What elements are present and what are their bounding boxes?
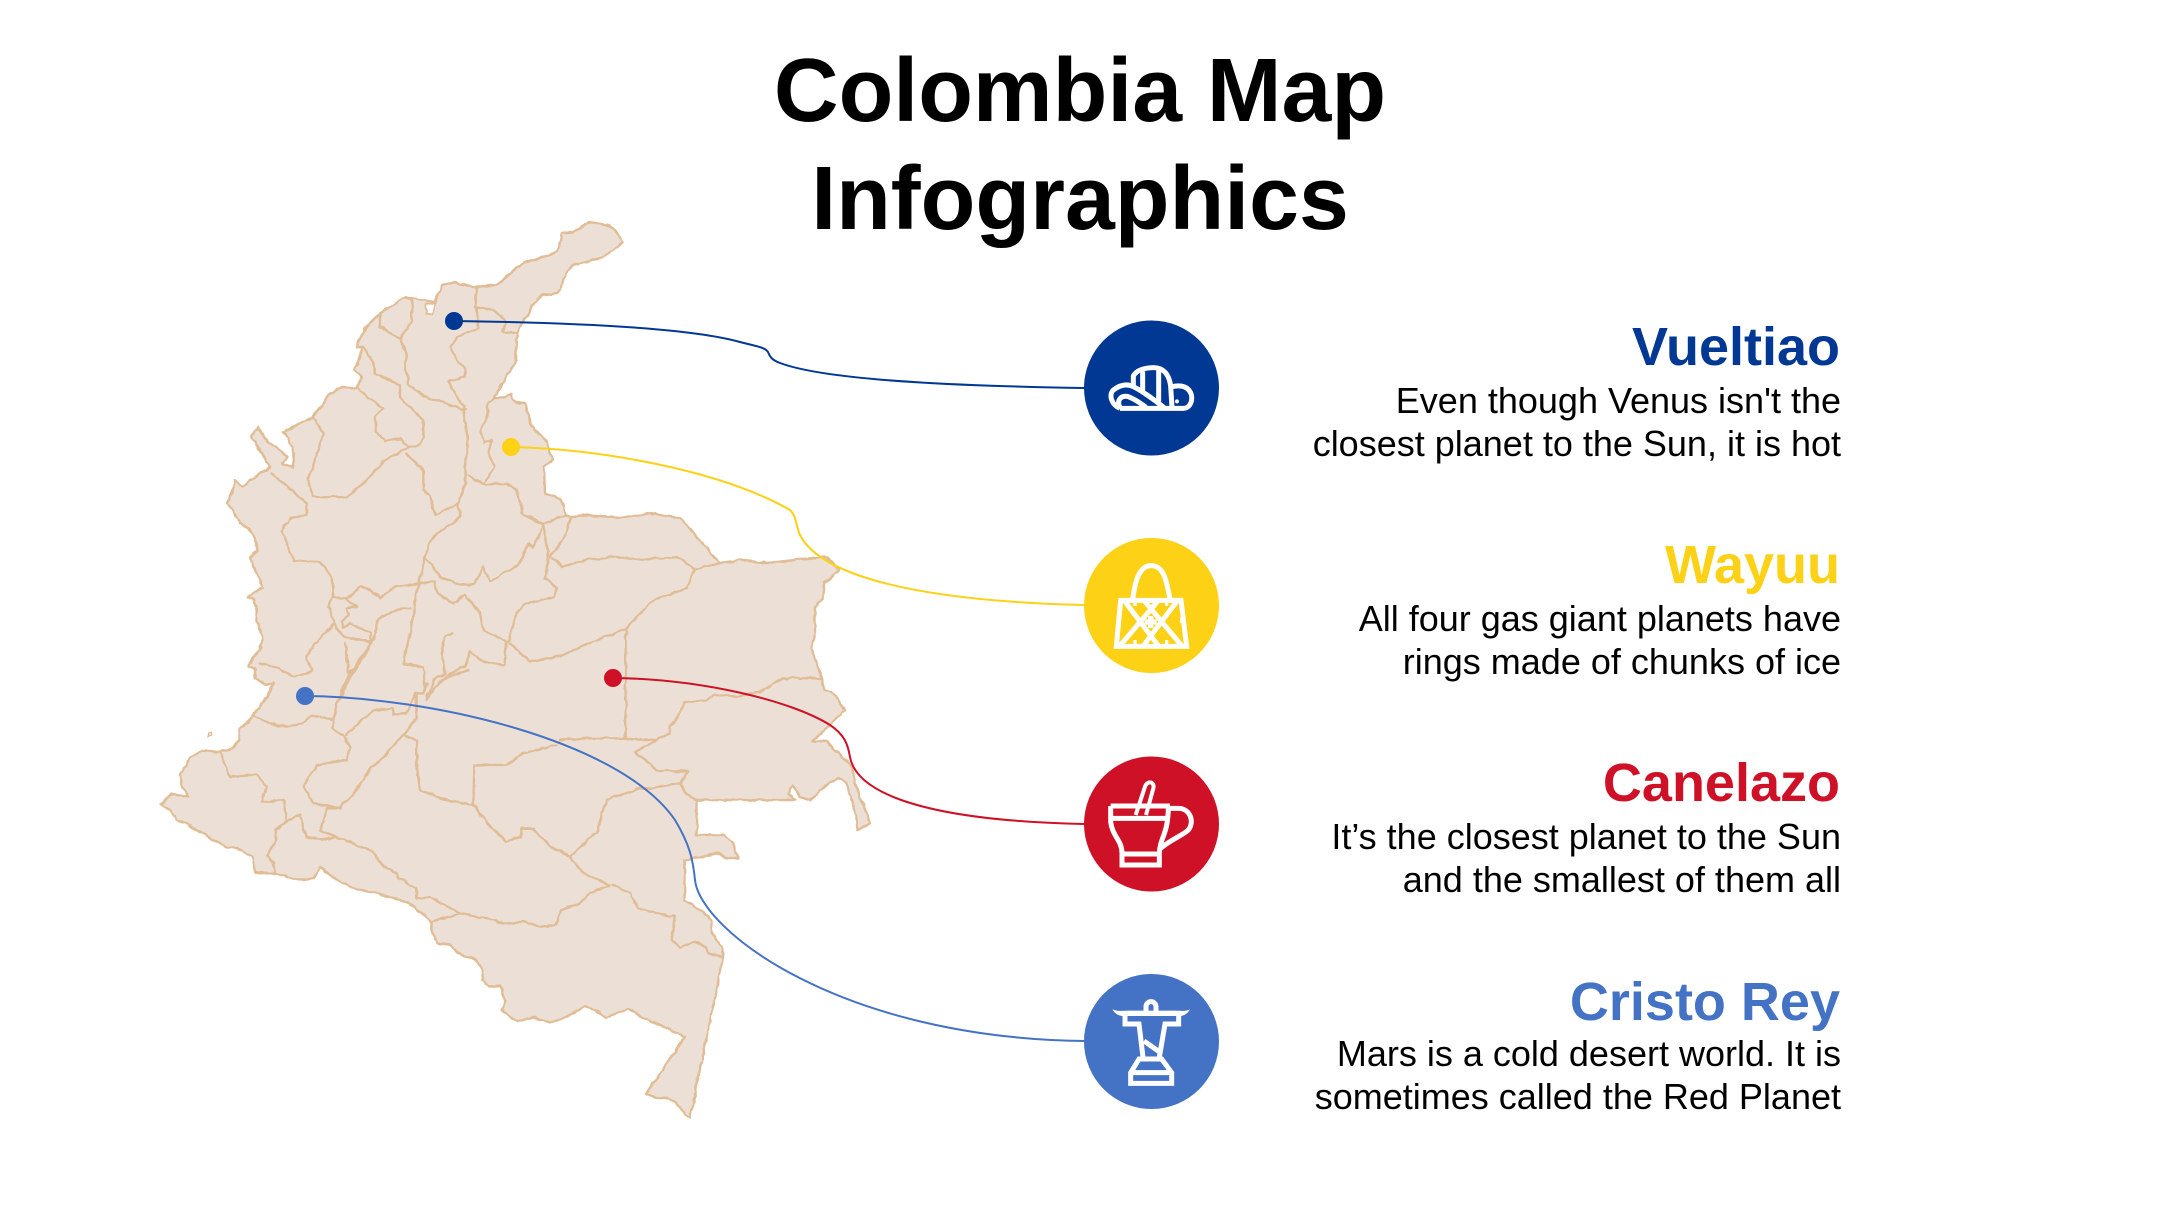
text block: Canelazo: Canelazo <box>1603 753 1840 813</box>
icon: wayuu bag <box>1084 538 1219 673</box>
southern department borders <box>208 650 640 927</box>
connector: Vueltiao <box>445 312 1084 388</box>
northern department borders <box>260 288 572 700</box>
text block: Vueltiao: Even though Venus isn't the <box>1396 380 1841 421</box>
text block: Wayuu <box>1359 535 1841 682</box>
text block: Cristo Rey: sometimes called the Red Planet <box>1315 1076 1841 1117</box>
text block: Vueltiao: closest planet to the Sun, it is hot <box>1313 423 1841 464</box>
text block: Vueltiao: Vueltiao <box>1632 317 1840 377</box>
map outline <box>161 222 870 1118</box>
text block: Canelazo: and the smallest of them all <box>1403 859 1841 900</box>
title: Colombia Map <box>774 40 1386 140</box>
connector: Canelazo <box>604 669 1084 824</box>
title: Infographics <box>811 148 1349 248</box>
eastern department borders <box>510 557 820 800</box>
Amazon department borders <box>613 885 723 957</box>
connector: Cristo Rey <box>296 687 1084 1041</box>
title <box>774 40 1386 248</box>
connector: Wayuu <box>502 438 1084 605</box>
icon: cristo rey statue <box>1084 974 1219 1109</box>
text block: Cristo Rey: Mars is a cold desert world. It is <box>1337 1033 1841 1074</box>
text block: Wayuu: All four gas giant planets have <box>1359 598 1841 639</box>
text block: Cristo Rey <box>1315 972 1841 1117</box>
map of Colombia <box>161 222 870 1118</box>
text block: Cristo Rey: Cristo Rey <box>1570 972 1840 1032</box>
icon: sombrero vueltiao <box>1084 320 1219 456</box>
text block: Canelazo: It’s the closest planet to the Sun <box>1331 816 1841 857</box>
text block: Wayuu: Wayuu <box>1665 535 1840 595</box>
text block: Canelazo <box>1331 753 1841 900</box>
icon: canelazo cup <box>1084 756 1219 892</box>
text block: Wayuu: rings made of chunks of ice <box>1403 641 1841 682</box>
text block: Vueltiao <box>1313 317 1841 464</box>
